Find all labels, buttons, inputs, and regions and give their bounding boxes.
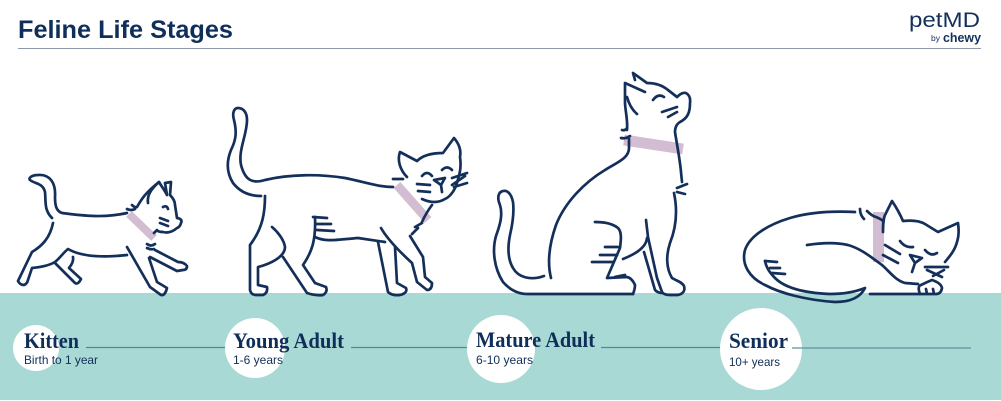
stage line: young adult to mature adult <box>351 346 468 348</box>
stage line: senior <box>792 347 971 349</box>
stage: young adult <box>225 318 345 378</box>
stage: senior: 10+ years <box>729 355 780 369</box>
stage line: kitten to young adult <box>86 346 226 348</box>
cat: senior <box>744 201 959 302</box>
stage: senior <box>720 308 802 390</box>
stage: kitten: Kitten <box>24 328 79 353</box>
logo: petMD by chewy: by <box>931 34 940 43</box>
logo: petMD by chewy <box>909 9 981 45</box>
stage: young adult: 1-6 years <box>233 353 283 367</box>
logo: petMD by chewy: chewy <box>943 31 981 45</box>
cat: young adult <box>228 108 467 295</box>
stage: mature adult: Mature Adult <box>476 327 596 352</box>
stage: kitten <box>13 325 98 371</box>
stage: mature adult: 6-10 years <box>476 353 533 367</box>
logo: petMD by chewy: petMD <box>909 9 980 32</box>
kitten collar <box>129 214 154 238</box>
title: Feline Life Stages <box>18 16 233 44</box>
cat: kitten <box>18 175 187 295</box>
senior collar <box>873 212 884 262</box>
ground band <box>0 293 1001 400</box>
stage line: mature adult to senior <box>601 346 722 348</box>
stage: senior: Senior <box>729 328 788 353</box>
cat: mature adult <box>494 73 690 295</box>
stage: young adult: Young Adult <box>233 328 345 353</box>
stage: mature adult <box>467 315 596 383</box>
stage: kitten: Birth to 1 year <box>24 353 98 367</box>
young adult collar <box>397 185 428 220</box>
mature adult collar <box>624 140 683 149</box>
